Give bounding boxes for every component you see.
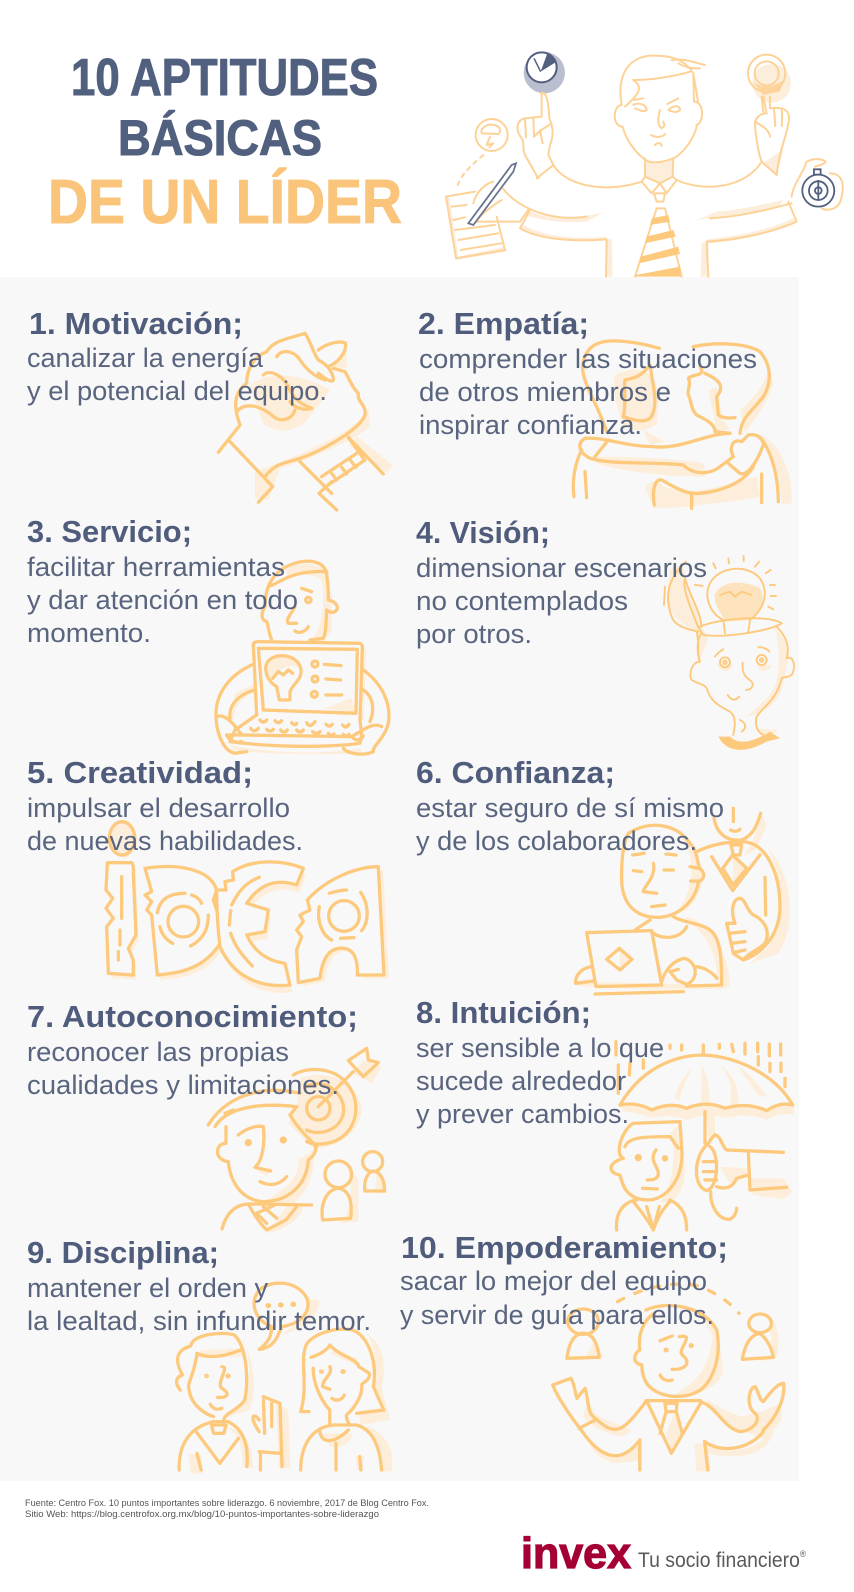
- skill 4: Visión: [416, 515, 707, 649]
- illustration 10: leader with team: [553, 1284, 784, 1472]
- illustration 2: two colleagues embracing: [573, 341, 792, 508]
- skill 2: Empatía: inspirar confianza.: [419, 410, 642, 440]
- skill 4: Visión: dimensionar escenarios: [416, 553, 707, 583]
- skill 3: Servicio: [27, 514, 298, 648]
- skill 9: Disciplina: la lealtad, sin infundir temor.: [27, 1306, 371, 1336]
- skill 5: Creatividad: impulsar el desarrollo: [27, 793, 290, 823]
- illustration 8: man under umbrella: [611, 1042, 794, 1230]
- title: 10 APTITUDES: [71, 49, 378, 107]
- skill 7: Autoconocimiento: reconocer las propias: [27, 1037, 289, 1067]
- skill 4: Visión: por otros.: [416, 619, 532, 649]
- illustration 1: handshake fist: [218, 333, 393, 510]
- skill 6: Confianza: 6. Confianza;: [416, 755, 615, 790]
- source note: Fuente: Centro Fox. 10 puntos importantes sobre liderazgo. 6 noviembre, 2017 de Blog Centro Fox.: [25, 1498, 429, 1509]
- title: BÁSICAS: [118, 110, 322, 166]
- skill 7: Autoconocimiento: [27, 999, 358, 1100]
- skill 1: Motivación: y el potencial del equipo.: [27, 376, 327, 406]
- skill 5: Creatividad: de nuevas habilidades.: [27, 826, 303, 856]
- skill 10: Empoderamiento: [400, 1230, 728, 1330]
- skill 8: Intuición: sucede alrededor: [416, 1066, 626, 1096]
- skill 6: Confianza: [416, 755, 724, 856]
- skill 5: Creatividad: 5. Creatividad;: [27, 755, 253, 790]
- skill 7: Autoconocimiento: cualidades y limitaciones.: [27, 1070, 339, 1100]
- skill 6: Confianza: estar seguro de sí mismo: [416, 793, 724, 823]
- logo: invex: ®: [800, 1549, 806, 1559]
- skill 9: Disciplina: 9. Disciplina;: [27, 1235, 219, 1270]
- illustration 3: man holding laptop: [216, 561, 389, 754]
- skill 10: Empoderamiento: 10. Empoderamiento;: [401, 1230, 728, 1265]
- skill 1: Motivación: canalizar la energía: [27, 343, 264, 373]
- skill 10: Empoderamiento: sacar lo mejor del equipo: [400, 1266, 707, 1296]
- skill 7: Autoconocimiento: 7. Autoconocimiento;: [27, 999, 358, 1034]
- illustration 9: two people talking: [177, 1283, 393, 1473]
- skill 3: Servicio: 3. Servicio;: [27, 514, 192, 549]
- skill 4: Visión: 4. Visión;: [416, 515, 550, 550]
- illustration 6: confident man with laptop and thumbs-up colleague: [575, 808, 790, 994]
- skill 10: Empoderamiento: y servir de guía para ellos.: [400, 1300, 714, 1330]
- logo: invex: invex: [521, 1529, 632, 1578]
- title: DE UN LÍDER: [48, 168, 402, 237]
- logo: invex: [521, 1529, 806, 1578]
- logo: invex: Tu socio financiero: [638, 1549, 813, 1572]
- skill 2: Empatía: de otros miembros e: [419, 377, 671, 407]
- skill 9: Disciplina: mantener el orden y: [27, 1273, 269, 1303]
- illustration 7: man with target and arrow: [208, 1048, 388, 1233]
- skill 8: Intuición: ser sensible a lo que: [416, 1033, 664, 1063]
- skill 3: Servicio: facilitar herramientas: [27, 552, 285, 582]
- source note: [25, 1498, 429, 1520]
- source note: Sitio Web: https://blog.centrofox.org.mx/blog/10-puntos-importantes-sobre-liderazgo: [25, 1509, 379, 1520]
- title: [48, 49, 402, 237]
- skill 8: Intuición: y prever cambios.: [416, 1099, 629, 1129]
- skill 3: Servicio: momento.: [27, 618, 151, 648]
- skill 1: Motivación: 1. Motivación;: [29, 306, 243, 341]
- skill 5: Creatividad: [27, 755, 303, 856]
- skill 8: Intuición: [416, 995, 664, 1129]
- panel: skills background: [0, 277, 799, 1481]
- illustration: leader with six arms: [446, 52, 843, 277]
- illustration 5: IDEA letters: [106, 822, 389, 993]
- skill 9: Disciplina: [27, 1235, 371, 1336]
- skill 2: Empatía: 2. Empatía;: [418, 306, 589, 341]
- skill 6: Confianza: y de los colaboradores.: [416, 826, 697, 856]
- illustration 4: head with light bulb: [664, 556, 794, 750]
- skill 3: Servicio: y dar atención en todo: [27, 585, 298, 615]
- skill 8: Intuición: 8. Intuición;: [416, 995, 591, 1030]
- skill 1: Motivación: [27, 306, 327, 406]
- skill 2: Empatía: comprender las situaciones: [419, 344, 757, 374]
- skill 4: Visión: no contemplados: [416, 586, 628, 616]
- skill 2: Empatía: [418, 306, 757, 440]
